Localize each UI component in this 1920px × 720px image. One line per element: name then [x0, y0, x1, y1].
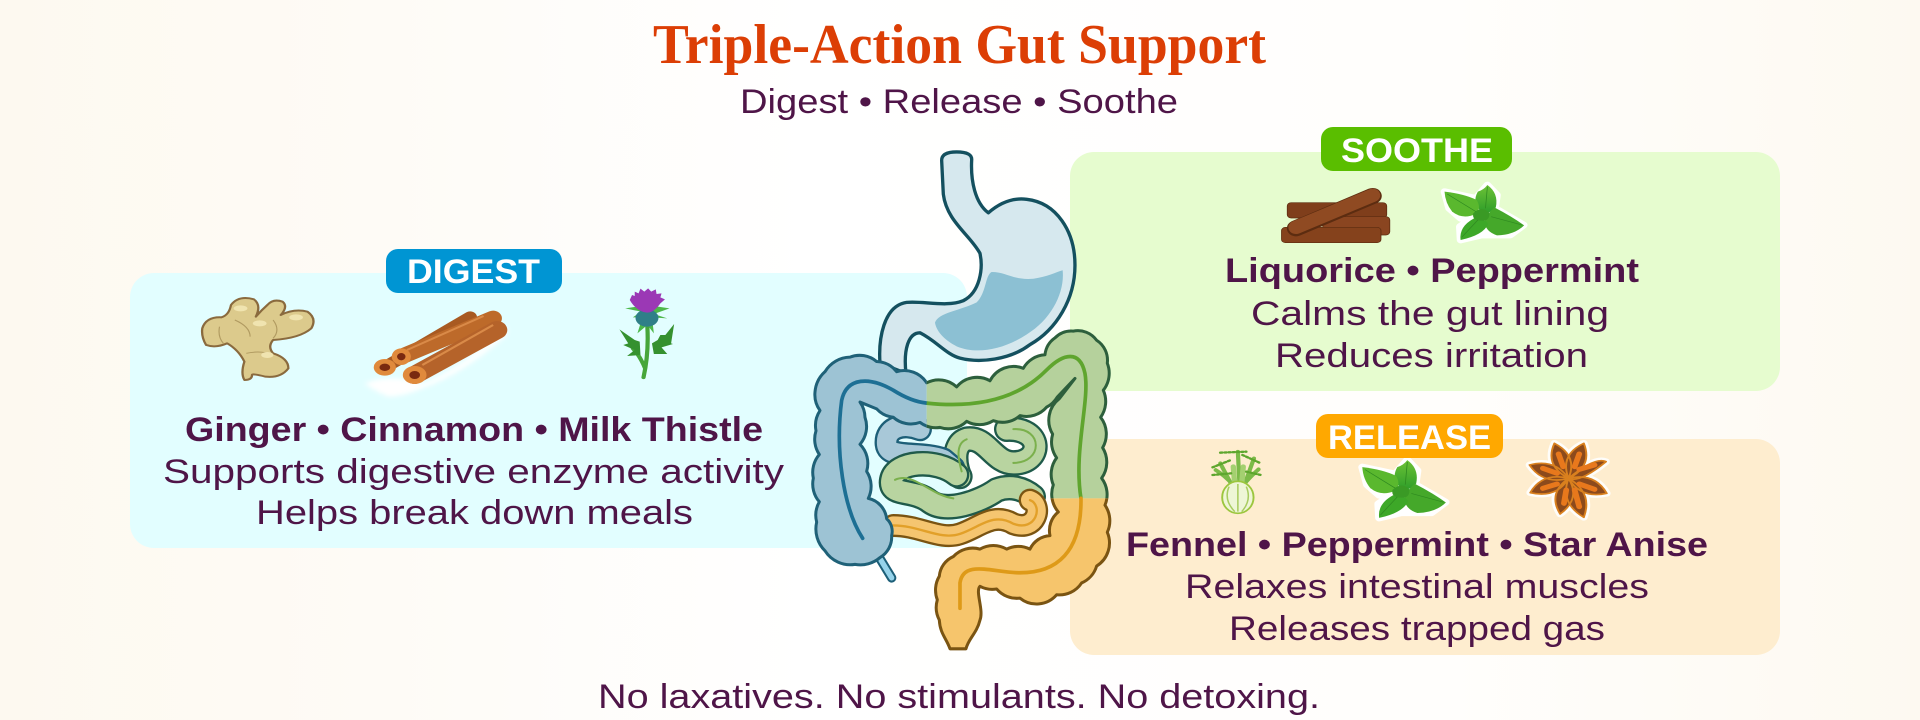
panel: soothe	[1070, 127, 1780, 391]
icon: liquorice	[1281, 195, 1390, 243]
large intestine: green section	[926, 329, 1111, 498]
text: release benefit 2: Releases trapped gas	[1229, 610, 1605, 648]
appendix	[878, 556, 892, 578]
icon: peppermint	[1445, 185, 1524, 240]
text: digest benefit 1: Supports digestive enzyme activity	[163, 453, 784, 491]
icon: cinnamon	[365, 316, 507, 397]
icon: ginger	[202, 298, 314, 380]
badge: release: RELEASE	[1328, 419, 1491, 457]
colon centre lines	[839, 356, 1086, 608]
panel: digest	[130, 249, 967, 548]
text: soothe benefit 1: Calms the gut lining	[1251, 295, 1609, 333]
text: release benefit 1: Relaxes intestinal muscles	[1185, 568, 1649, 606]
panel: release	[1070, 414, 1780, 655]
text: digest benefit 2: Helps break down meals	[256, 494, 693, 532]
badge: digest	[386, 249, 562, 293]
badge: soothe: SOOTHE	[1341, 132, 1493, 170]
text: soothe herbs: Liquorice • Peppermint	[1225, 252, 1639, 290]
digestive tract illustration	[813, 152, 1110, 649]
badge: soothe	[1321, 127, 1512, 171]
stomach	[880, 152, 1075, 373]
large intestine: blue section	[811, 354, 927, 566]
title: Triple-Action Gut Support	[653, 14, 1266, 76]
subtitle: Digest • Release • Soothe	[740, 83, 1178, 121]
small intestine	[887, 426, 1037, 536]
icon: fennel	[1213, 452, 1261, 513]
footer note: No laxatives. No stimulants. No detoxing.	[598, 678, 1320, 716]
text: soothe benefit 2: Reduces irritation	[1275, 337, 1588, 375]
icon: peppermint	[1362, 460, 1446, 518]
text: digest herbs: Ginger • Cinnamon • Milk Thistle	[185, 411, 763, 449]
icon: star anise	[1529, 443, 1607, 517]
large intestine: orange section	[934, 498, 1112, 650]
badge: digest: DIGEST	[407, 253, 540, 291]
icon: milk thistle	[619, 288, 674, 377]
text: release herbs: Fennel • Peppermint • Star Anise	[1126, 526, 1708, 564]
